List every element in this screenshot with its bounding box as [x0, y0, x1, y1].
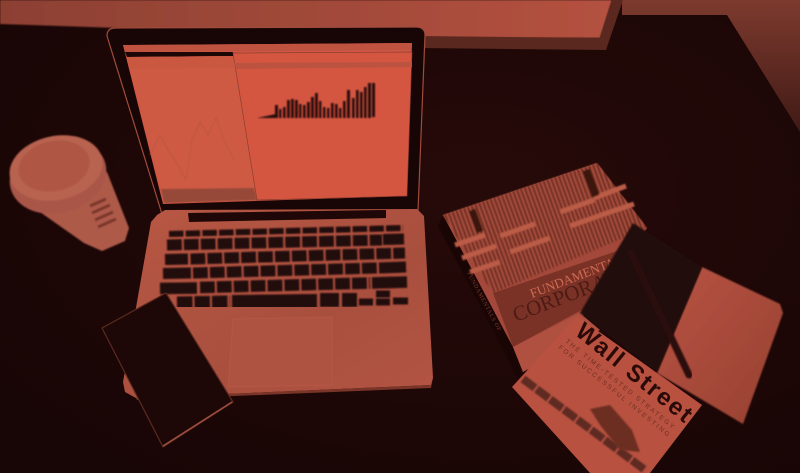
book cover columns: [443, 163, 647, 293]
book banner band: [523, 379, 645, 470]
black notebook: [580, 223, 702, 372]
book spine title: FUNDAMENTALS OF: [465, 271, 502, 333]
bar chart on right window: [257, 83, 375, 118]
laptop: [107, 27, 433, 400]
smartphone: [102, 293, 233, 447]
keyboard: [160, 228, 408, 303]
book: Fundamentals of Corporate Finance: [438, 163, 647, 378]
laptop lid and bezel: [107, 27, 425, 214]
book title: FUNDAMENTALS: [528, 249, 631, 301]
book tagline: THE TIME-TESTED STRATEGY: [564, 338, 676, 431]
coffee cup: [1, 127, 129, 251]
trackpad: [228, 317, 332, 387]
screen: [123, 43, 412, 204]
book: Wall Street: [512, 316, 702, 473]
laptop base and palm rest: [123, 209, 433, 398]
book subtitle: CORPORATE: [509, 260, 632, 327]
white notepad page: [657, 267, 783, 424]
pen: [631, 253, 689, 375]
hinge: [188, 210, 386, 222]
front edge: [136, 378, 433, 400]
book bricks image: [590, 405, 640, 452]
book tagline: FOR SUCCESSFUL INVESTING: [557, 344, 671, 438]
book title: Wall Street: [570, 318, 698, 428]
line chart on left window: [150, 118, 235, 180]
